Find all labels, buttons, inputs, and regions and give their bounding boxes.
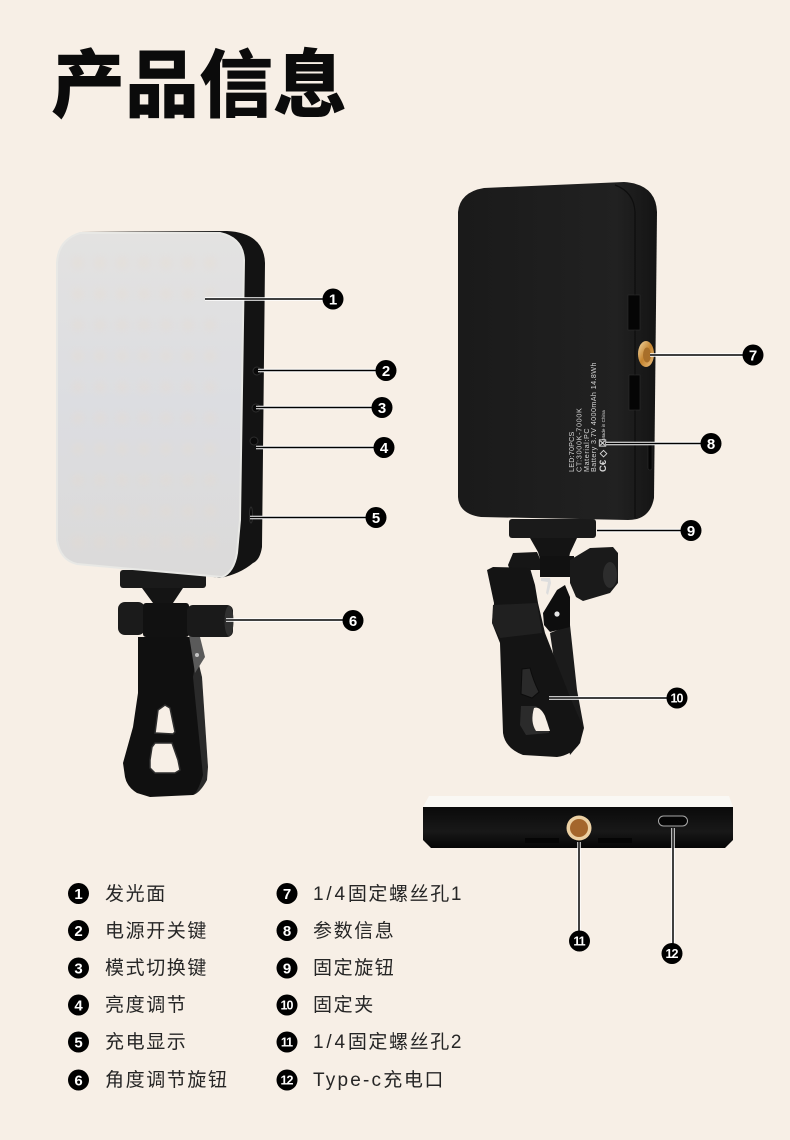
pivot barrel (142, 588, 183, 617)
legend: right column: 1/4固定螺丝孔2 (313, 1031, 463, 1053)
parameter text: C€ ◇ ☒ (598, 438, 609, 472)
callout badges: 4 (380, 440, 389, 457)
legend: left column: 发光面 (105, 883, 167, 905)
legend: left column: 3 (74, 960, 83, 978)
gold screw hole (638, 341, 654, 367)
legend: right column: 固定旋钮 (313, 957, 395, 979)
legend: left column: 4 (74, 998, 83, 1014)
front view: LED light with clip (57, 231, 265, 797)
callout badges: 12 (666, 947, 678, 961)
legend: right column: 固定夹 (313, 994, 375, 1016)
callout badges: 2 (382, 363, 390, 380)
diffuser panel (57, 233, 244, 577)
callout badges: 3 (378, 400, 386, 417)
front clip (118, 570, 234, 797)
bottom view of light (423, 796, 733, 848)
callout badges: 9 (687, 523, 695, 540)
legend: left column: 角度调节旋钮 (105, 1069, 229, 1091)
callout badges: 1 (329, 292, 337, 308)
back body (458, 182, 657, 520)
legend: right column: Type-c充电口 (313, 1069, 445, 1091)
legend: left column: 亮度调节 (105, 994, 187, 1016)
parameter text: LED:70PCS (567, 431, 576, 472)
parameter text: Made in China (601, 410, 606, 440)
side slots (628, 295, 652, 470)
parameter text: Battery 3.7V 4000mAh 14.8Wh (589, 362, 598, 472)
back view: LED light with clip (458, 182, 657, 757)
side buttons (250, 367, 261, 523)
legend: left column: 1 (74, 886, 83, 903)
legend: left column (68, 883, 229, 1091)
callout badges: 5 (372, 510, 380, 527)
legend: right column: 1/4固定螺丝孔1 (313, 883, 463, 905)
legend: left column: 模式切换键 (105, 957, 208, 979)
legend: right column (276, 883, 463, 1091)
legend: left column: 2 (74, 923, 83, 940)
front body (80, 231, 265, 578)
callout badges: 10 (671, 692, 683, 706)
legend: right column: 10 (281, 998, 293, 1012)
clip holes (155, 705, 175, 734)
legend: left column: 充电显示 (105, 1031, 187, 1053)
callout badges: 8 (707, 436, 715, 453)
leader lines (205, 299, 753, 953)
legend: left column: 6 (74, 1072, 83, 1090)
legend: right column: 参数信息 (313, 920, 395, 942)
legend: right column: 12 (281, 1074, 293, 1088)
parameter text (567, 362, 609, 472)
LED dots (67, 248, 221, 558)
callout badges (322, 288, 764, 964)
back clip (487, 519, 618, 757)
legend: right column: 11 (281, 1036, 293, 1050)
parameter text: CT:3000K-7000K (574, 407, 584, 472)
parameter text: Material:PC (582, 428, 591, 472)
callout badges: 11 (573, 934, 586, 948)
tripod knob (120, 570, 206, 588)
legend: right column: 7 (283, 886, 291, 903)
title: 产品信息 (51, 44, 347, 127)
Type-c port (658, 816, 688, 826)
legend: right column: 9 (283, 960, 291, 978)
pivot arm and knob (540, 556, 574, 577)
bottom gold screw (566, 816, 592, 840)
legend: right column: 8 (283, 923, 291, 940)
clip holes (521, 668, 539, 698)
legend: left column: 电源开关键 (105, 920, 208, 942)
callout badges: 6 (349, 613, 357, 630)
tripod knob (509, 519, 596, 538)
callout badges: 7 (749, 348, 757, 364)
legend: left column: 5 (74, 1034, 83, 1052)
